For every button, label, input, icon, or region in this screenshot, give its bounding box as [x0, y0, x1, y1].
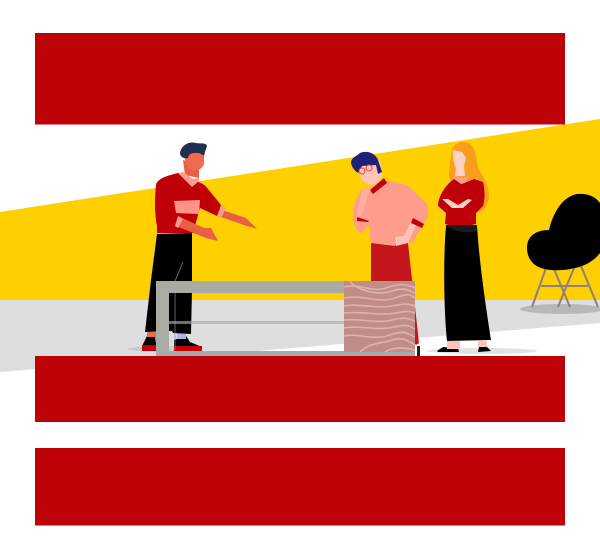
man's hair: [180, 143, 207, 158]
table left leg: [156, 281, 169, 356]
chair legs: [532, 266, 598, 307]
floor shadow: woman: [427, 348, 537, 354]
man's near arm: [174, 200, 200, 214]
table bottom rail: [169, 351, 415, 356]
table middle rail: [169, 321, 345, 324]
woman's face and neck: [453, 150, 466, 176]
woman's trousers: [444, 226, 491, 341]
man's trousers: [145, 233, 192, 334]
yellow slanted background: [0, 119, 600, 301]
icon: black chair: [520, 194, 600, 314]
glasses man's shoe: [417, 346, 420, 356]
floor shadow: man: [128, 346, 202, 352]
woman's waistband: [446, 225, 477, 232]
wood panel: [344, 281, 415, 352]
woman's hair: [449, 142, 489, 212]
man's socks: [147, 332, 156, 337]
table top rail: [156, 281, 345, 293]
red banner: bottom: [35, 448, 565, 526]
glasses man's hand and forearm: [357, 186, 372, 217]
glasses man's cuffs: [357, 217, 369, 222]
table: [156, 281, 415, 356]
woman's collar: [453, 176, 469, 184]
woman's sweater: [438, 179, 484, 228]
figure: woman with orange hair: [437, 142, 491, 352]
red banner: top: [35, 33, 565, 124]
woman's feet: [447, 341, 460, 349]
chair shadow: [520, 304, 600, 314]
man's shoes: [142, 336, 157, 351]
man's red sweater: [155, 173, 221, 233]
chair seat: [527, 194, 600, 270]
man's sleeve cuffs: [217, 205, 226, 218]
figure: man in red sweater: [142, 143, 257, 351]
man's trouser seam: [175, 262, 183, 350]
grey floor: [0, 300, 600, 372]
glasses man's trousers: [371, 243, 419, 345]
glasses man's shirt: [353, 180, 428, 246]
woman's crossed hands: [442, 199, 472, 208]
glasses man's collar: [370, 178, 387, 194]
man's neck and face: [183, 160, 199, 178]
woman's shoes: [437, 347, 459, 352]
red banner: middle: [35, 356, 565, 422]
figure: man with glasses: [351, 152, 428, 356]
glasses man's neck and face: [358, 160, 382, 185]
man's far arm: [214, 205, 257, 229]
glasses: [359, 165, 372, 174]
man's collar: [178, 172, 199, 187]
glasses man's hair: [351, 152, 382, 174]
